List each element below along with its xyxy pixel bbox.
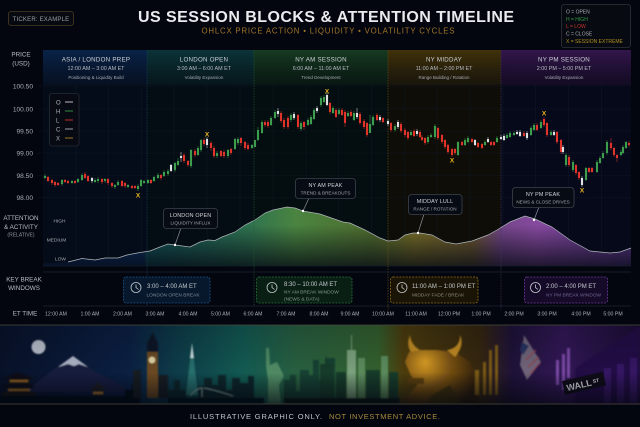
callout: NY PM peak: NEWS & CLOSE DRIVES (516, 200, 570, 204)
break window: NY AM: NY AM BREAK WINDOW (284, 290, 339, 296)
callout: NY PM peak (512, 188, 574, 221)
Wall Street sign: ST (591, 378, 600, 385)
grid lines (38, 85, 631, 266)
key break windows label (6, 276, 43, 292)
panel: London open header (147, 50, 254, 85)
price axis labels: 98.50 (16, 173, 33, 180)
time axis: 7:00 AM (276, 312, 296, 318)
section separators (43, 272, 631, 306)
mountain (25, 356, 125, 392)
time axis: 1:00 PM (471, 312, 491, 318)
time axis: 8:00 AM (309, 312, 329, 318)
time axis: 3:00 AM (145, 312, 165, 318)
panel: NY PM session header: Volatility Expansion (545, 75, 584, 80)
attention level labels: MEDIUM (47, 238, 66, 244)
moon (32, 340, 46, 354)
time axis: 6:00 AM (243, 312, 263, 318)
banner: world financial city panorama (0, 325, 640, 404)
time axis: 12:00 AM (45, 312, 67, 318)
callout: NY AM peak (296, 178, 356, 212)
time axis: 9:00 AM (340, 312, 360, 318)
New York skyline (284, 335, 400, 404)
callout: NY AM peak: NY AM PEAK (308, 183, 343, 189)
session extreme markers: X (580, 188, 585, 194)
price axis title: PRICE (11, 52, 31, 58)
panel: London open header: 3:00 AM – 6:00 AM ET (177, 66, 232, 72)
attention axis labels: ATTENTION (3, 215, 39, 222)
price axis labels (13, 84, 33, 202)
callout: London open (164, 208, 218, 246)
pagoda left (0, 372, 36, 398)
session extreme markers: X (542, 110, 547, 118)
legend: OHLCX key: X = SESSION EXTREME (566, 39, 623, 45)
Wall Street sign: WALL (566, 378, 593, 393)
panel: NY PM session header (501, 50, 631, 85)
panel: Asia / London prep header: ASIA / LONDON PREP (62, 56, 130, 64)
disclaimer footer: ILLUSTRATIVE GRAPHIC ONLY. (190, 412, 322, 421)
time axis: 5:00 AM (211, 312, 230, 318)
panel: London open header: LONDON OPEN (180, 56, 228, 64)
legend: OHLCX key: L = LOW (566, 24, 586, 30)
disclaimer footer (190, 412, 440, 421)
break window: NY AM: 8:30 – 10:00 AM ET (284, 282, 337, 288)
Statue of Liberty (266, 348, 284, 403)
time axis: 10:00 AM (372, 312, 394, 318)
panel: NY midday header (388, 50, 501, 85)
break window: London (124, 277, 210, 303)
price axis labels: 99.00 (16, 150, 33, 158)
attention axis labels (3, 215, 39, 238)
dark skyline (0, 384, 140, 404)
panel: NY AM session header: 6:00 AM – 11:00 AM ET (293, 66, 350, 72)
legend: series key (50, 94, 79, 146)
attention level labels (47, 218, 66, 262)
break window: midday (390, 277, 478, 303)
attention level labels: HIGH (54, 218, 66, 224)
callout: midday lull (408, 194, 462, 234)
London skyline and bridge (168, 375, 264, 404)
break window: London: 3:00 – 4:00 AM ET (147, 284, 197, 290)
key break windows label: KEY BREAK (6, 276, 43, 284)
time axis: 2:00 AM (113, 312, 132, 318)
session extreme markers: X (205, 132, 210, 138)
green candles (45, 95, 626, 191)
time axis: 5:00 PM (603, 312, 623, 318)
legend: series key: O (56, 100, 61, 106)
legend: OHLCX key: O = OPEN (566, 10, 590, 16)
disclaimer footer: NOT INVESTMENT ADVICE. (329, 412, 440, 421)
session extreme markers (136, 88, 585, 200)
callout: midday lull: MIDDAY LULL (417, 199, 453, 205)
ticker badge: TICKER: EXAMPLE (13, 17, 69, 23)
panel: Asia / London prep header (43, 50, 147, 85)
time axis: 12:00 PM (438, 312, 460, 318)
callout: NY PM peak: NY PM PEAK (526, 192, 560, 198)
price axis labels: 100.50 (13, 84, 33, 90)
price axis title: (USD) (12, 60, 30, 68)
price axis labels: 100.00 (13, 106, 33, 114)
price axis labels: 98.00 (16, 195, 33, 202)
panel: Asia / London prep header: 12:00 AM – 3:00 AM ET (68, 66, 125, 72)
white candles (92, 93, 582, 187)
break window: NY AM (256, 277, 352, 303)
break window: midday: 11:00 AM – 1:00 PM ET (412, 284, 476, 290)
session extreme markers: X (136, 192, 141, 200)
icon: clock (131, 282, 141, 292)
callout: London open: LONDON OPEN (170, 213, 211, 219)
break window: midday: MIDDAY FADE / BREAK (412, 292, 465, 298)
callout: London open: LIQUIDITY INFLUX (170, 220, 210, 226)
time axis: 1:00 AM (80, 312, 100, 318)
panel: NY midday header: 11:00 AM – 2:00 PM ET (416, 66, 473, 72)
title: US SESSION BLOCKS & ATTENTION TIMELINE (138, 9, 514, 26)
attention level labels: LOW (55, 256, 66, 262)
time axis (45, 312, 623, 318)
gold chart bars (475, 345, 498, 395)
ticker badge (8, 12, 74, 26)
pagoda right (90, 382, 106, 397)
panel: NY PM session header: 2:00 PM – 5:00 PM ET (537, 66, 592, 72)
panel: NY midday header: NY MIDDAY (426, 56, 462, 64)
legend: OHLCX key (562, 4, 630, 48)
price axis title (11, 52, 31, 68)
panel: NY AM session header (254, 50, 388, 85)
panel: NY PM session header: NY PM SESSION (538, 56, 590, 64)
price axis labels: 99.50 (16, 128, 33, 136)
legend: series key: X (56, 136, 60, 142)
break window: NY AM: (NEWS & DATA) (284, 296, 320, 302)
time axis: 3:00 PM (537, 312, 557, 318)
the Shard (186, 343, 198, 395)
icon: clock (267, 282, 277, 292)
attention axis labels: & ACTIVITY (4, 224, 39, 231)
key break windows label: WINDOWS (8, 285, 40, 292)
legend: OHLCX key: H = HIGH (566, 17, 588, 23)
callout: NY AM peak: TREND & BREAKOUTS (301, 190, 350, 196)
panel: session column tints (43, 85, 631, 266)
time axis: 4:00 AM (178, 312, 198, 318)
legend: series key: C (56, 128, 61, 134)
purple chart bars (556, 348, 570, 390)
time axis: 11:00 AM (405, 312, 427, 318)
panel: NY midday header: Range Building / Rotation (418, 75, 470, 80)
panel: NY AM session header: NY AM SESSION (295, 56, 347, 64)
Big Ben (133, 332, 168, 398)
US flag (520, 335, 541, 380)
Wall Street sign (562, 372, 606, 395)
break window: NY PM: 2:00 – 4:00 PM ET (546, 284, 596, 290)
icon: clock (397, 282, 407, 292)
time axis: 4:00 PM (571, 312, 591, 318)
Wall Street building (575, 326, 640, 404)
panel: Asia / London prep header: Positioning & Liquidity Build (68, 75, 124, 80)
panel: NY AM session header: Trend Development (301, 75, 341, 80)
time axis: 2:00 PM (504, 312, 524, 318)
legend: series key: H (56, 110, 60, 116)
legend: OHLCX key: C = CLOSE (566, 32, 593, 38)
ET time label: ET TIME (13, 310, 37, 318)
session extreme markers: X (325, 88, 330, 96)
legend: series key: L (56, 118, 60, 124)
break window: London: LONDON OPEN BREAK (146, 292, 200, 298)
break window: NY PM: NY PM BREAK WINDOW (546, 292, 602, 298)
attention area chart (43, 200, 631, 266)
callout: midday lull: RANGE / ROTATION (413, 206, 457, 212)
session extreme markers: X (450, 158, 455, 164)
break window: NY PM (524, 277, 608, 303)
red candles (48, 102, 629, 189)
subtitle: OHLCX PRICE ACTION • LIQUIDITY • VOLATILITY CYCLES (202, 26, 454, 36)
icon: clock (530, 282, 540, 292)
golden bull (400, 335, 480, 404)
candlestick chart (45, 93, 629, 191)
session dividers (147, 50, 501, 310)
attention axis labels: (RELATIVE) (7, 232, 35, 238)
panel: London open header: Volatility Expansion (185, 75, 224, 80)
